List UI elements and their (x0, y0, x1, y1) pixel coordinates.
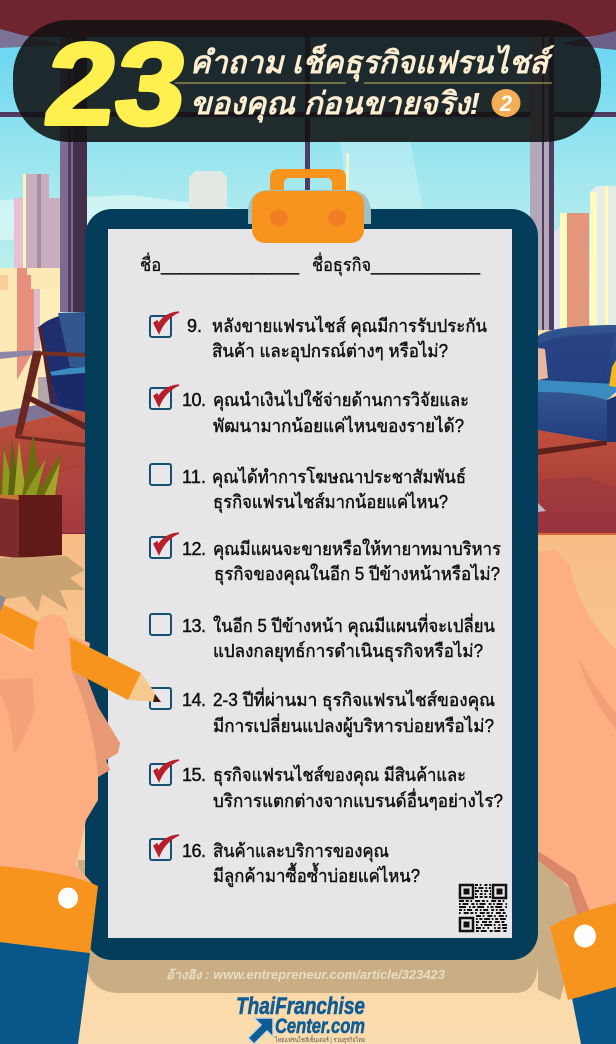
pencil (0, 595, 161, 702)
item 11 (150, 464, 466, 513)
checklist (150, 312, 503, 887)
item 9: 9. (187, 316, 202, 336)
item 12: ธุรกิจของคุณในอีก 5 ปีข้างหน้าหรือไม่? (214, 563, 500, 585)
QR code (459, 885, 507, 931)
item 10 (150, 385, 469, 436)
form fields: name and business: ชื่อ_______________ (140, 252, 300, 276)
badge: part 2 (492, 89, 520, 117)
item 12: 12. (182, 539, 206, 559)
item 16: 16. (182, 841, 206, 861)
item 16 (150, 835, 420, 887)
clipboard board (85, 209, 538, 960)
item 9: สินค้า และอุปกรณ์ต่างๆ หรือไม่? (212, 340, 448, 362)
item 16: สินค้าและบริการของคุณ (213, 841, 389, 862)
item 13: ในอีก 5 ปีข้างหน้า คุณมีแผนที่จะเปลี่ยน (213, 613, 495, 637)
item 16: มีลูกค้ามาซื้อซ้ำบ่อยแค่ไหน? (213, 863, 420, 887)
item 15: 15. (182, 765, 206, 785)
item 10: คุณนำเงินไปใช้จ่ายด้านการวิจัยและ (213, 389, 469, 411)
item 9 (150, 312, 487, 362)
logo: ThaiFranchise Center: ไทยแฟรนไชส์เซ็นเตอร์ | รวมธุรกิจไทย (274, 1035, 365, 1044)
right hand (538, 550, 616, 916)
item 13 (150, 613, 495, 662)
plant (0, 434, 85, 612)
left sleeve (0, 866, 98, 1044)
title text (190, 43, 555, 123)
item 12 (150, 533, 501, 585)
form fields: name and business: ชื่อธุรกิจ____________ (312, 252, 481, 276)
source reference: อ้างอิง : www.entrepreneur.com/article/323423 (166, 968, 445, 982)
item 14 (150, 687, 495, 737)
title text: คำถาม เช็คธุรกิจแฟรนไชส์ (190, 43, 555, 82)
item 14: 2-3 ปีที่ผ่านมา ธุรกิจแฟรนไชส์ของคุณ (213, 687, 495, 711)
item 11: 11. (182, 467, 206, 487)
item 15: ธุรกิจแฟรนไชส์ของคุณ มีสินค้าและ (213, 764, 466, 786)
left hand (0, 632, 120, 890)
rug and floor (0, 377, 616, 1044)
item 12: คุณมีแผนจะขายหรือให้ทายาทมาบริหาร (213, 538, 501, 560)
item 13: แปลงกลยุทธ์การดำเนินธุรกิจหรือไม่? (213, 640, 483, 662)
item 14: มีการเปลี่ยนแปลงผู้บริหารบ่อยหรือไม่? (213, 713, 494, 737)
item 13: 13. (182, 616, 206, 636)
armchair (15, 312, 85, 447)
buildings: left skyline (0, 174, 62, 414)
logo: ThaiFranchise Center (236, 993, 365, 1044)
right sleeve (550, 903, 616, 1044)
clipboard shadow (77, 853, 538, 993)
right arm shadow (538, 855, 585, 1000)
window frames (60, 37, 554, 330)
buildings: right skyline (554, 186, 616, 333)
form fields: name and business (140, 252, 481, 276)
logo: ThaiFranchise Center: Center.com (275, 1015, 365, 1038)
title text: ของคุณ ก่อนขายจริง! (190, 86, 480, 123)
title pill (13, 20, 601, 142)
title number 23: 23 (39, 19, 194, 149)
item 9: หลังขายแฟรนไชส์ คุณมีการรับประกัน (212, 315, 487, 337)
logo: ThaiFranchise Center: ThaiFranchise (236, 993, 365, 1020)
paper (108, 229, 512, 938)
item 15 (150, 760, 503, 811)
item 11: ธุรกิจแฟรนไชส์มากน้อยแค่ไหน? (213, 491, 448, 513)
clip (248, 169, 371, 243)
buildings: centre tower (189, 153, 349, 209)
sofa (538, 325, 616, 512)
railing (0, 350, 42, 359)
item 10: พัฒนามากน้อยแค่ไหนของรายได้? (213, 415, 464, 436)
badge: part 2: 2 (499, 91, 513, 116)
item 14: 14. (182, 690, 206, 710)
item 11: คุณได้ทำการโฆษณาประชาสัมพันธ์ (212, 466, 466, 488)
item 15: บริการแตกต่างจากแบรนด์อื่นๆอย่างไร? (213, 788, 503, 811)
finger holding pencil (33, 615, 74, 730)
item 10: 10. (182, 390, 206, 410)
